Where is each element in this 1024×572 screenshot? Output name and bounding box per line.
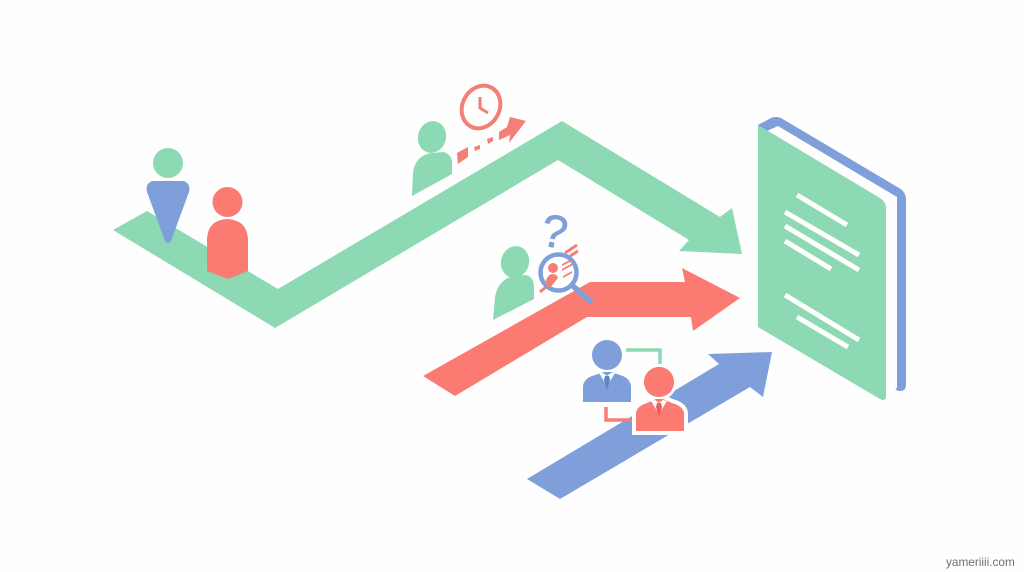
two connected business people [583, 340, 684, 431]
person: green head and blue body [147, 148, 189, 243]
dashed arrow [457, 117, 526, 164]
magnifier [540, 254, 590, 301]
icon: clock [454, 79, 508, 135]
green person [493, 243, 534, 320]
person: blue suit [583, 340, 631, 402]
green person [412, 118, 452, 196]
watermark: yameriiii.com [946, 555, 1015, 569]
book cover [758, 125, 886, 400]
connector: green [626, 350, 660, 364]
cover text lines [785, 195, 859, 347]
red arrow [423, 268, 740, 396]
book back and spine [758, 117, 906, 391]
blue arrow [527, 352, 772, 499]
person: red [207, 187, 248, 279]
question mark: ? [537, 203, 572, 259]
pages [767, 126, 897, 398]
document book [758, 117, 906, 400]
person with magnifier and question mark [493, 203, 590, 320]
person: red suit [636, 367, 684, 431]
magnifier handle [574, 287, 590, 301]
person with clock and dashed arrow [412, 79, 526, 196]
connector: red [606, 407, 638, 420]
profile inside lens [545, 259, 573, 288]
first pair of people [147, 148, 248, 279]
red profile lines behind lens [540, 245, 578, 292]
green zigzag arrow [113, 121, 742, 328]
